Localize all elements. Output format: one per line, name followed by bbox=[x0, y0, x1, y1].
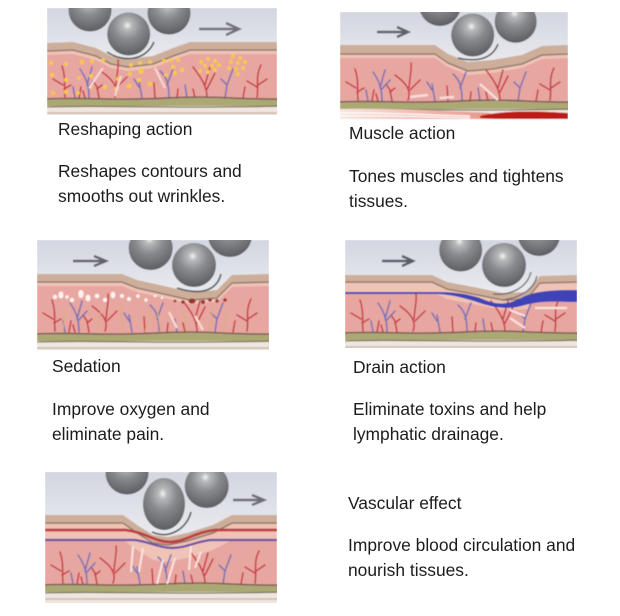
text: sedation description: Improve oxygen and bbox=[52, 399, 210, 419]
metal spheres bbox=[105, 472, 230, 530]
panel: vascular effect illustration bbox=[45, 472, 277, 603]
panel: reshaping action illustration bbox=[47, 8, 277, 115]
metal spheres bbox=[438, 240, 560, 288]
heading: vascular effect: Vascular effect bbox=[348, 493, 462, 513]
panel: drain action illustration bbox=[345, 240, 577, 348]
text: reshaping description: Reshapes contours and bbox=[58, 161, 242, 181]
lymph vessel bbox=[345, 290, 577, 308]
text: reshaping description: smooths out wrinkles. bbox=[58, 186, 225, 206]
arrow bbox=[382, 256, 413, 266]
arrow bbox=[199, 23, 239, 35]
text: muscle description: Tones muscles and tightens bbox=[349, 166, 564, 186]
vein bbox=[45, 540, 277, 548]
text: vascular description: Improve blood circulation and bbox=[348, 535, 575, 555]
text: sedation description: eliminate pain. bbox=[52, 424, 164, 444]
red cells bbox=[174, 298, 227, 304]
light streaks bbox=[410, 84, 498, 100]
panel: muscle action illustration bbox=[340, 12, 568, 120]
heading: muscle action: Muscle action bbox=[349, 123, 455, 143]
swoosh bbox=[107, 42, 154, 59]
skin layers bbox=[345, 274, 577, 348]
panel: sedation illustration bbox=[37, 240, 269, 350]
arrow bbox=[377, 27, 408, 37]
metal spheres bbox=[128, 240, 252, 288]
skin layers bbox=[340, 44, 568, 120]
arrow bbox=[233, 495, 264, 505]
swoosh bbox=[458, 44, 498, 60]
fat cells bbox=[49, 54, 247, 95]
text: vascular description: nourish tissues. bbox=[348, 560, 469, 580]
light streaks bbox=[169, 312, 203, 330]
artery bbox=[45, 530, 277, 542]
text: drain description: lymphatic drainage. bbox=[353, 424, 504, 444]
text: drain description: Eliminate toxins and help bbox=[353, 399, 546, 419]
skin layers bbox=[45, 514, 277, 603]
heading: sedation: Sedation bbox=[52, 356, 121, 376]
skin layers bbox=[37, 274, 269, 350]
text: muscle description: tissues. bbox=[349, 191, 408, 211]
swoosh bbox=[152, 512, 191, 535]
heading: drain action: Drain action bbox=[353, 357, 446, 377]
swoosh bbox=[177, 274, 221, 292]
metal spheres bbox=[420, 12, 538, 57]
skin layers bbox=[47, 42, 277, 115]
light streaks bbox=[510, 308, 567, 328]
light streaks bbox=[131, 546, 201, 584]
swoosh bbox=[493, 272, 537, 300]
muscle bbox=[340, 109, 490, 120]
light streaks bbox=[89, 68, 165, 96]
heading: reshaping action: Reshaping action bbox=[58, 119, 192, 139]
arrow bbox=[73, 256, 106, 266]
white cells bbox=[53, 290, 163, 302]
metal spheres bbox=[68, 8, 191, 56]
